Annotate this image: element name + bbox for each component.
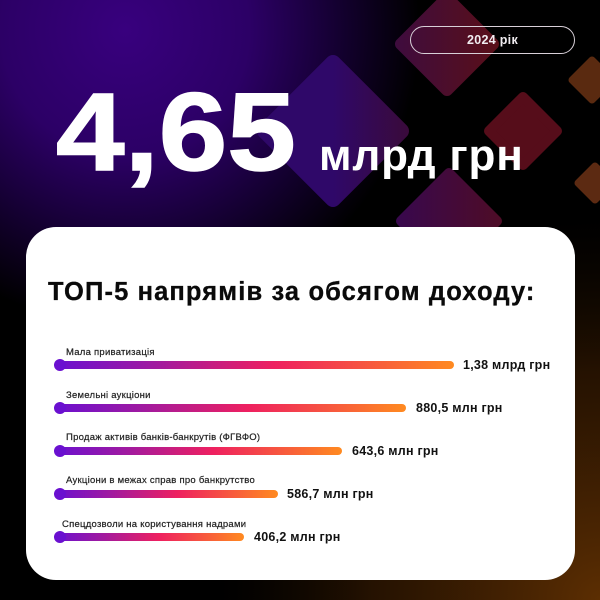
icon: small orange diamond top <box>572 60 600 100</box>
text: 406,2 млн грн <box>254 530 341 544</box>
icon: small orange diamond bottom <box>578 166 600 200</box>
text: Спецдозволи на користування надрами <box>62 519 246 530</box>
text: Аукціони в межах справ про банкрутство <box>66 475 255 486</box>
big number: 4,65 <box>56 71 296 194</box>
text: 586,7 млн грн <box>287 487 374 501</box>
bar row 2 <box>54 390 503 415</box>
panel: white card <box>26 227 575 580</box>
text: 880,5 млн грн <box>416 401 503 415</box>
icon: large purple diamond <box>265 63 401 199</box>
bar row 5 <box>54 519 341 544</box>
text: Мала приватизація <box>66 347 155 358</box>
icon: bottom magenta diamond <box>401 173 497 269</box>
bar row 1 <box>54 347 550 372</box>
text: 1,38 млрд грн <box>463 358 550 372</box>
year badge: 2024 рік <box>467 33 518 47</box>
icon: top red diamond <box>401 0 493 90</box>
bar row 3 <box>54 432 439 458</box>
year badge <box>410 26 575 54</box>
text: 643,6 млн грн <box>352 444 439 458</box>
icon: right red diamond <box>489 97 557 165</box>
heading: ТОП-5 напрямів за обсягом доходу: <box>48 278 536 306</box>
text: Продаж активів банків-банкрутів (ФГВФО) <box>66 432 260 443</box>
unit label: млрд грн <box>319 131 524 180</box>
bar row 4 <box>54 475 374 501</box>
text: Земельні аукціони <box>66 390 151 401</box>
